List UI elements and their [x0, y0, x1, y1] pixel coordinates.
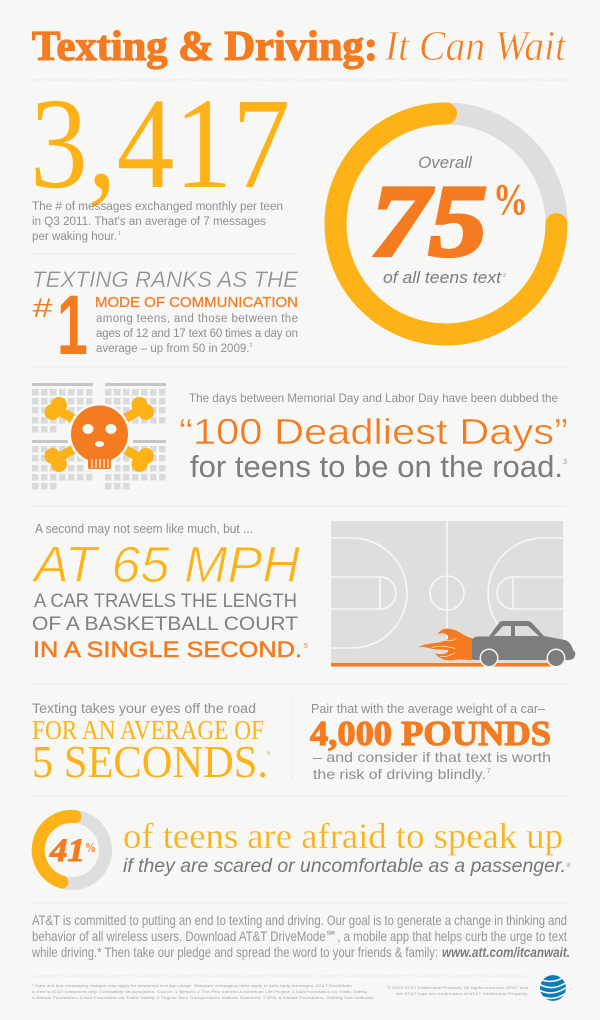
4,000 pounds text block: 7 — [487, 769, 491, 775]
65 mph text block: 5 — [304, 643, 308, 650]
donut chart: 75% of teens text: % — [493, 175, 528, 224]
4,000 pounds text block: – and consider if that text is worth — [313, 749, 551, 765]
messages description — [32, 201, 283, 243]
100 deadliest days text: The days between Memorial Day and Labor Day have been dubbed the — [189, 391, 558, 405]
five seconds text block: 6 — [267, 751, 271, 757]
number one ranking block: 2 — [249, 343, 252, 349]
messages description: 1 — [118, 231, 121, 237]
five seconds text block: 5 SECONDS. — [32, 736, 268, 787]
number one ranking block: 1 — [57, 280, 88, 373]
donut chart: 75% of teens text: 2 — [503, 273, 506, 279]
donut chart: 75% of teens text: Overall — [418, 153, 473, 172]
41 percent statement: if they are scared or uncomfortable as a passenger. — [123, 856, 566, 877]
4,000 pounds text block — [310, 702, 551, 782]
donut chart: 75% of teens text: of all teens text — [383, 268, 502, 287]
donut chart: 41% afraid to speak up: 41 — [49, 833, 85, 869]
number one ranking block: MODE OF COMMUNICATION — [95, 294, 298, 311]
number one ranking block: # — [32, 293, 53, 323]
icon: car with flames — [418, 621, 575, 668]
100 deadliest days text: 3 — [563, 459, 567, 466]
number one ranking block — [32, 267, 298, 373]
65 mph text block: A CAR TRAVELS THE LENGTH — [34, 591, 297, 612]
donut chart: 41% afraid to speak up — [38, 816, 106, 884]
donut chart: 75% of teens text — [336, 114, 556, 334]
number one ranking block: TEXTING RANKS AS THE — [32, 267, 298, 292]
closing commitment paragraph — [31, 912, 570, 960]
4,000 pounds text block: the risk of driving blindly. — [313, 766, 486, 782]
100 deadliest days text: for teens to be on the road. — [190, 449, 563, 484]
4,000 pounds text block: 4,000 POUNDS — [310, 714, 551, 753]
donut chart: 75% of teens text: 75 — [371, 165, 487, 278]
big number: 3,417 messages: 3,417 — [30, 72, 290, 216]
100 deadliest days text — [179, 391, 568, 484]
messages description: in Q3 2011. That's an average of 7 messages — [32, 216, 266, 228]
five seconds text block — [32, 701, 271, 787]
65 mph text block: IN A SINGLE SECOND. — [33, 637, 302, 662]
footnotes — [32, 983, 375, 1000]
41 percent statement — [123, 816, 571, 877]
copyright: © 2012 AT&T Intellectual Property. All rights reserved. AT&T and — [387, 985, 528, 990]
100 deadliest days text: “100 Deadliest Days” — [179, 411, 568, 452]
number one ranking block: among teens, and those between the — [96, 313, 298, 325]
41 percent statement: 8 — [567, 863, 571, 869]
title: Texting & Driving: — [32, 24, 378, 70]
41 percent statement: of teens are afraid to speak up — [123, 816, 563, 856]
title: It Can Wait — [384, 24, 567, 70]
closing commitment paragraph: while driving.* Then take our pledge and spread the word to your friends & family: — [31, 944, 438, 960]
65 mph text block: OF A BASKETBALL COURT — [32, 614, 298, 635]
footnotes: * Data and text messaging charges may apply for download and app usage. Standard messaging rates apply to auto-reply messages. AT&T DriveMode — [32, 983, 353, 988]
five seconds text block: FOR AN AVERAGE OF — [32, 715, 264, 745]
number one ranking block: average – up from 50 in 2009. — [96, 343, 249, 355]
closing commitment paragraph: www.att.com/itcanwait. — [442, 944, 570, 960]
65 mph text block: AT 65 MPH — [31, 536, 300, 593]
icon: skull and crossbones over stadium seats — [32, 383, 166, 490]
65 mph text block — [31, 522, 308, 662]
footnotes: 4 Allstate Foundation; 5 AAA Foundation for Traffic Safety; 6 Virginia Tech Transportation Institute Research; 7 EPA; 8 Allstate Foundation, Shifting Teen Attitudes. — [32, 995, 375, 1000]
basketball court illustration — [331, 521, 575, 668]
number one ranking block: ages of 12 and 17 text 60 times a day on — [96, 328, 298, 340]
messages description: The # of messages exchanged monthly per teen — [32, 201, 283, 213]
copyright — [387, 985, 528, 996]
messages description: per waking hour. — [32, 231, 117, 243]
title — [32, 24, 567, 70]
footnotes: is free to AT&T customers only. Compatible devices/plans. Source: 1 Nielsen; 2 The Pew Internet & American Life Project; 3 AAA Foundation for Traffic Safety; — [32, 989, 368, 994]
donut chart: 41% afraid to speak up: % — [85, 841, 96, 856]
five seconds text block: Texting takes your eyes off the road — [32, 701, 256, 716]
copyright: the AT&T logo are trademarks of AT&T Intellectual Property. — [396, 991, 528, 996]
4,000 pounds text block: Pair that with the average weight of a car– — [311, 702, 545, 716]
icon: AT&T globe logo — [539, 975, 567, 1001]
65 mph text block: A second may not seem like much, but ... — [35, 522, 253, 536]
